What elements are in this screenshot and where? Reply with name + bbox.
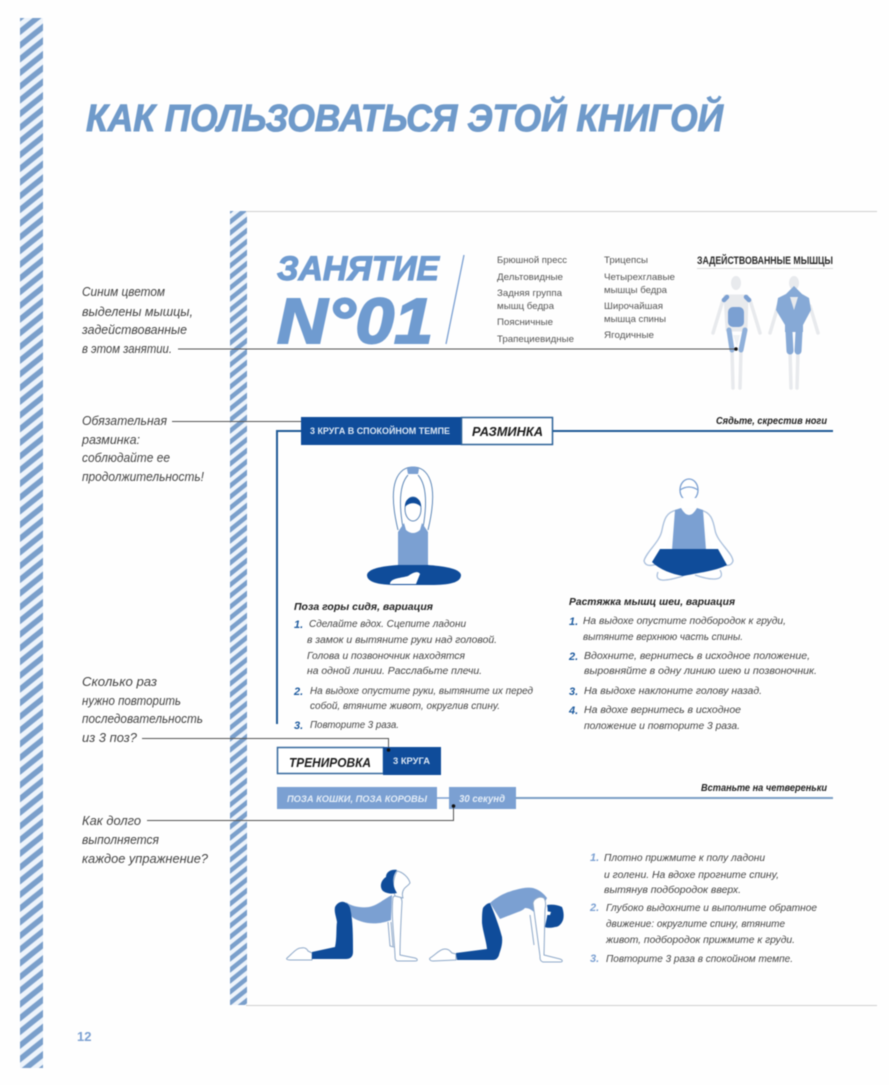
- muscle list: Дельтовидные: [497, 272, 563, 283]
- exercise text: seated mountain pose: 2.: [293, 686, 303, 698]
- callout: duration: [82, 804, 455, 866]
- callout: highlighted muscles: в этом занятии.: [82, 342, 172, 356]
- exercise text: neck stretch: вытяните верхнюю часть спины.: [583, 632, 743, 643]
- muscle list: Трапециевидные: [497, 334, 574, 345]
- warm-up header: [301, 417, 552, 445]
- exercise text: seated mountain pose: Поза горы сидя, вариация: [294, 602, 433, 613]
- lesson heading: ЗАНЯТИЕ: [277, 250, 440, 288]
- warm-up header: РАЗМИНКА: [472, 424, 543, 439]
- exercise text: cat and cow: 1.: [590, 852, 599, 864]
- icon: front body muscles: [713, 276, 760, 388]
- exercise text: seated mountain pose: 3.: [294, 720, 303, 732]
- callout: highlighted muscles: Синим цветом: [82, 285, 165, 299]
- muscle list: Четырехглавые: [604, 272, 675, 283]
- exercise text: seated mountain pose: Сделайте вдох. Сцепите ладони: [309, 619, 466, 630]
- exercise text: seated mountain pose: На выдохе опустите руки, вытяните их перед: [310, 686, 533, 697]
- exercise text: cat and cow: движение: округлите спину, втяните: [606, 919, 785, 930]
- warm-up section rule: [277, 431, 833, 724]
- muscle list: Задняя группа: [497, 288, 563, 299]
- exercise text: neck stretch: На вдохе вернитесь в исходное: [584, 705, 741, 716]
- exercise text: cat and cow: вытянув подбородок вверх.: [604, 884, 741, 896]
- exercise text: cat and cow: Глубоко выдохните и выполните обратное: [606, 902, 817, 914]
- muscles heading: [697, 254, 833, 268]
- panel: sample page: [230, 211, 877, 1006]
- callout: duration: выполняется: [82, 833, 159, 847]
- left striped page border: [20, 18, 43, 1068]
- muscle list: мышцы бедра: [604, 285, 668, 296]
- workout header: [278, 747, 441, 775]
- exercise text: seated mountain pose: собой, втяните живот, округлив спину.: [310, 700, 500, 712]
- exercise text: neck stretch: 4.: [568, 705, 578, 717]
- exercise text: seated mountain pose: 1.: [294, 619, 303, 631]
- exercise text: cat and cow: 2.: [589, 902, 599, 914]
- workout header: ТРЕНИРОВКА: [289, 755, 371, 770]
- warm-up header: 3 КРУГА В СПОКОЙНОМ ТЕМПЕ: [310, 425, 450, 437]
- figure: seated mountain pose: [367, 466, 461, 585]
- exercise text: seated mountain pose: на одной линии. Расслабьте плечи.: [307, 665, 482, 677]
- muscle list: Широчайшая: [604, 301, 663, 312]
- figure: cow pose: [287, 870, 417, 961]
- callout: highlighted muscles: выделены мышцы,: [82, 305, 193, 319]
- exercise text: seated mountain pose: Повторите 3 раза.: [310, 720, 399, 731]
- callout: warm-up: [81, 414, 302, 484]
- callout: highlighted muscles: [81, 285, 738, 356]
- exercise text: seated mountain pose: в замок и вытяните руки над головой.: [307, 635, 497, 646]
- exercise bar: [277, 787, 833, 809]
- callout: warm-up: Обязательная: [82, 414, 167, 428]
- exercise text: neck stretch: 3.: [569, 686, 578, 698]
- callout: repetitions: [82, 675, 388, 750]
- exercise text: neck stretch: выровняйте в одну линию шею и позвоночник.: [584, 666, 817, 677]
- exercise text: neck stretch: положение и повторите 3 раза.: [584, 721, 740, 732]
- exercise text: cat and cow: 3.: [590, 953, 599, 965]
- callout: duration: Как долго: [82, 814, 141, 828]
- muscle list: Поясничные: [497, 317, 553, 328]
- exercise text: neck stretch: 1.: [569, 616, 578, 628]
- callout: repetitions: последовательность: [82, 712, 203, 726]
- lesson heading: N°01: [277, 285, 433, 357]
- title: КАК ПОЛЬЗОВАТЬСЯ ЭТОЙ КНИГОЙ: [86, 95, 724, 140]
- exercise text: neck stretch: На выдохе наклоните голову назад.: [584, 686, 762, 697]
- muscle list: мышца спины: [604, 314, 666, 325]
- muscle list: Ягодичные: [604, 330, 654, 341]
- workout position note: Встаньте на четвереньки: [701, 783, 827, 794]
- muscle list: мышц бедра: [497, 301, 555, 312]
- exercise text: neck stretch: 2.: [568, 651, 578, 663]
- exercise bar: 30 секунд: [459, 794, 505, 805]
- exercise text: neck stretch: Вдохните, вернитесь в исходное положение,: [584, 651, 810, 662]
- icon: back body muscles: [770, 276, 818, 388]
- page number: 12: [77, 1029, 91, 1044]
- muscle list: Брюшной пресс: [497, 255, 567, 266]
- callout: highlighted muscles: задействованные: [81, 323, 187, 337]
- muscle list: [497, 255, 675, 345]
- muscle list: Трицепсы: [604, 255, 648, 266]
- callout: warm-up: разминка:: [81, 433, 140, 447]
- callout: repetitions: из 3 поз?: [82, 731, 137, 745]
- workout header: 3 КРУГА: [393, 756, 430, 767]
- callout: repetitions: нужно повторить: [82, 694, 181, 708]
- exercise text: neck stretch: [568, 597, 817, 732]
- figure: cat pose: [430, 888, 564, 962]
- lesson heading: [277, 250, 464, 357]
- muscles heading: ЗАДЕЙСТВОВАННЫЕ МЫШЦЫ: [697, 254, 833, 267]
- exercise text: cat and cow: [589, 852, 817, 965]
- exercise text: seated mountain pose: Голова и позвоночник находятся: [307, 651, 466, 662]
- callout: warm-up: соблюдайте ее: [82, 451, 170, 465]
- exercise text: seated mountain pose: [293, 602, 533, 732]
- figure: neck stretch: [644, 479, 733, 580]
- exercise text: cat and cow: Повторите 3 раза в спокойном темпе.: [606, 954, 793, 965]
- callout: warm-up: продолжительность!: [82, 470, 204, 484]
- exercise text: neck stretch: Растяжка мышц шеи, вариация: [569, 597, 735, 608]
- exercise text: cat and cow: Плотно прижмите к полу ладони: [604, 853, 765, 864]
- exercise text: neck stretch: На выдохе опустите подбородок к груди,: [583, 615, 786, 627]
- callout: duration: каждое упражнение?: [82, 852, 208, 866]
- callout: repetitions: Сколько раз: [82, 675, 157, 689]
- exercise text: cat and cow: живот, подбородок прижмите к груди.: [605, 934, 795, 946]
- exercise text: cat and cow: и голени. На вдохе прогните спину,: [604, 870, 779, 881]
- warm-up position note: Сядьте, скрестив ноги: [716, 416, 827, 427]
- exercise bar: ПОЗА КОШКИ, ПОЗА КОРОВЫ: [287, 794, 427, 805]
